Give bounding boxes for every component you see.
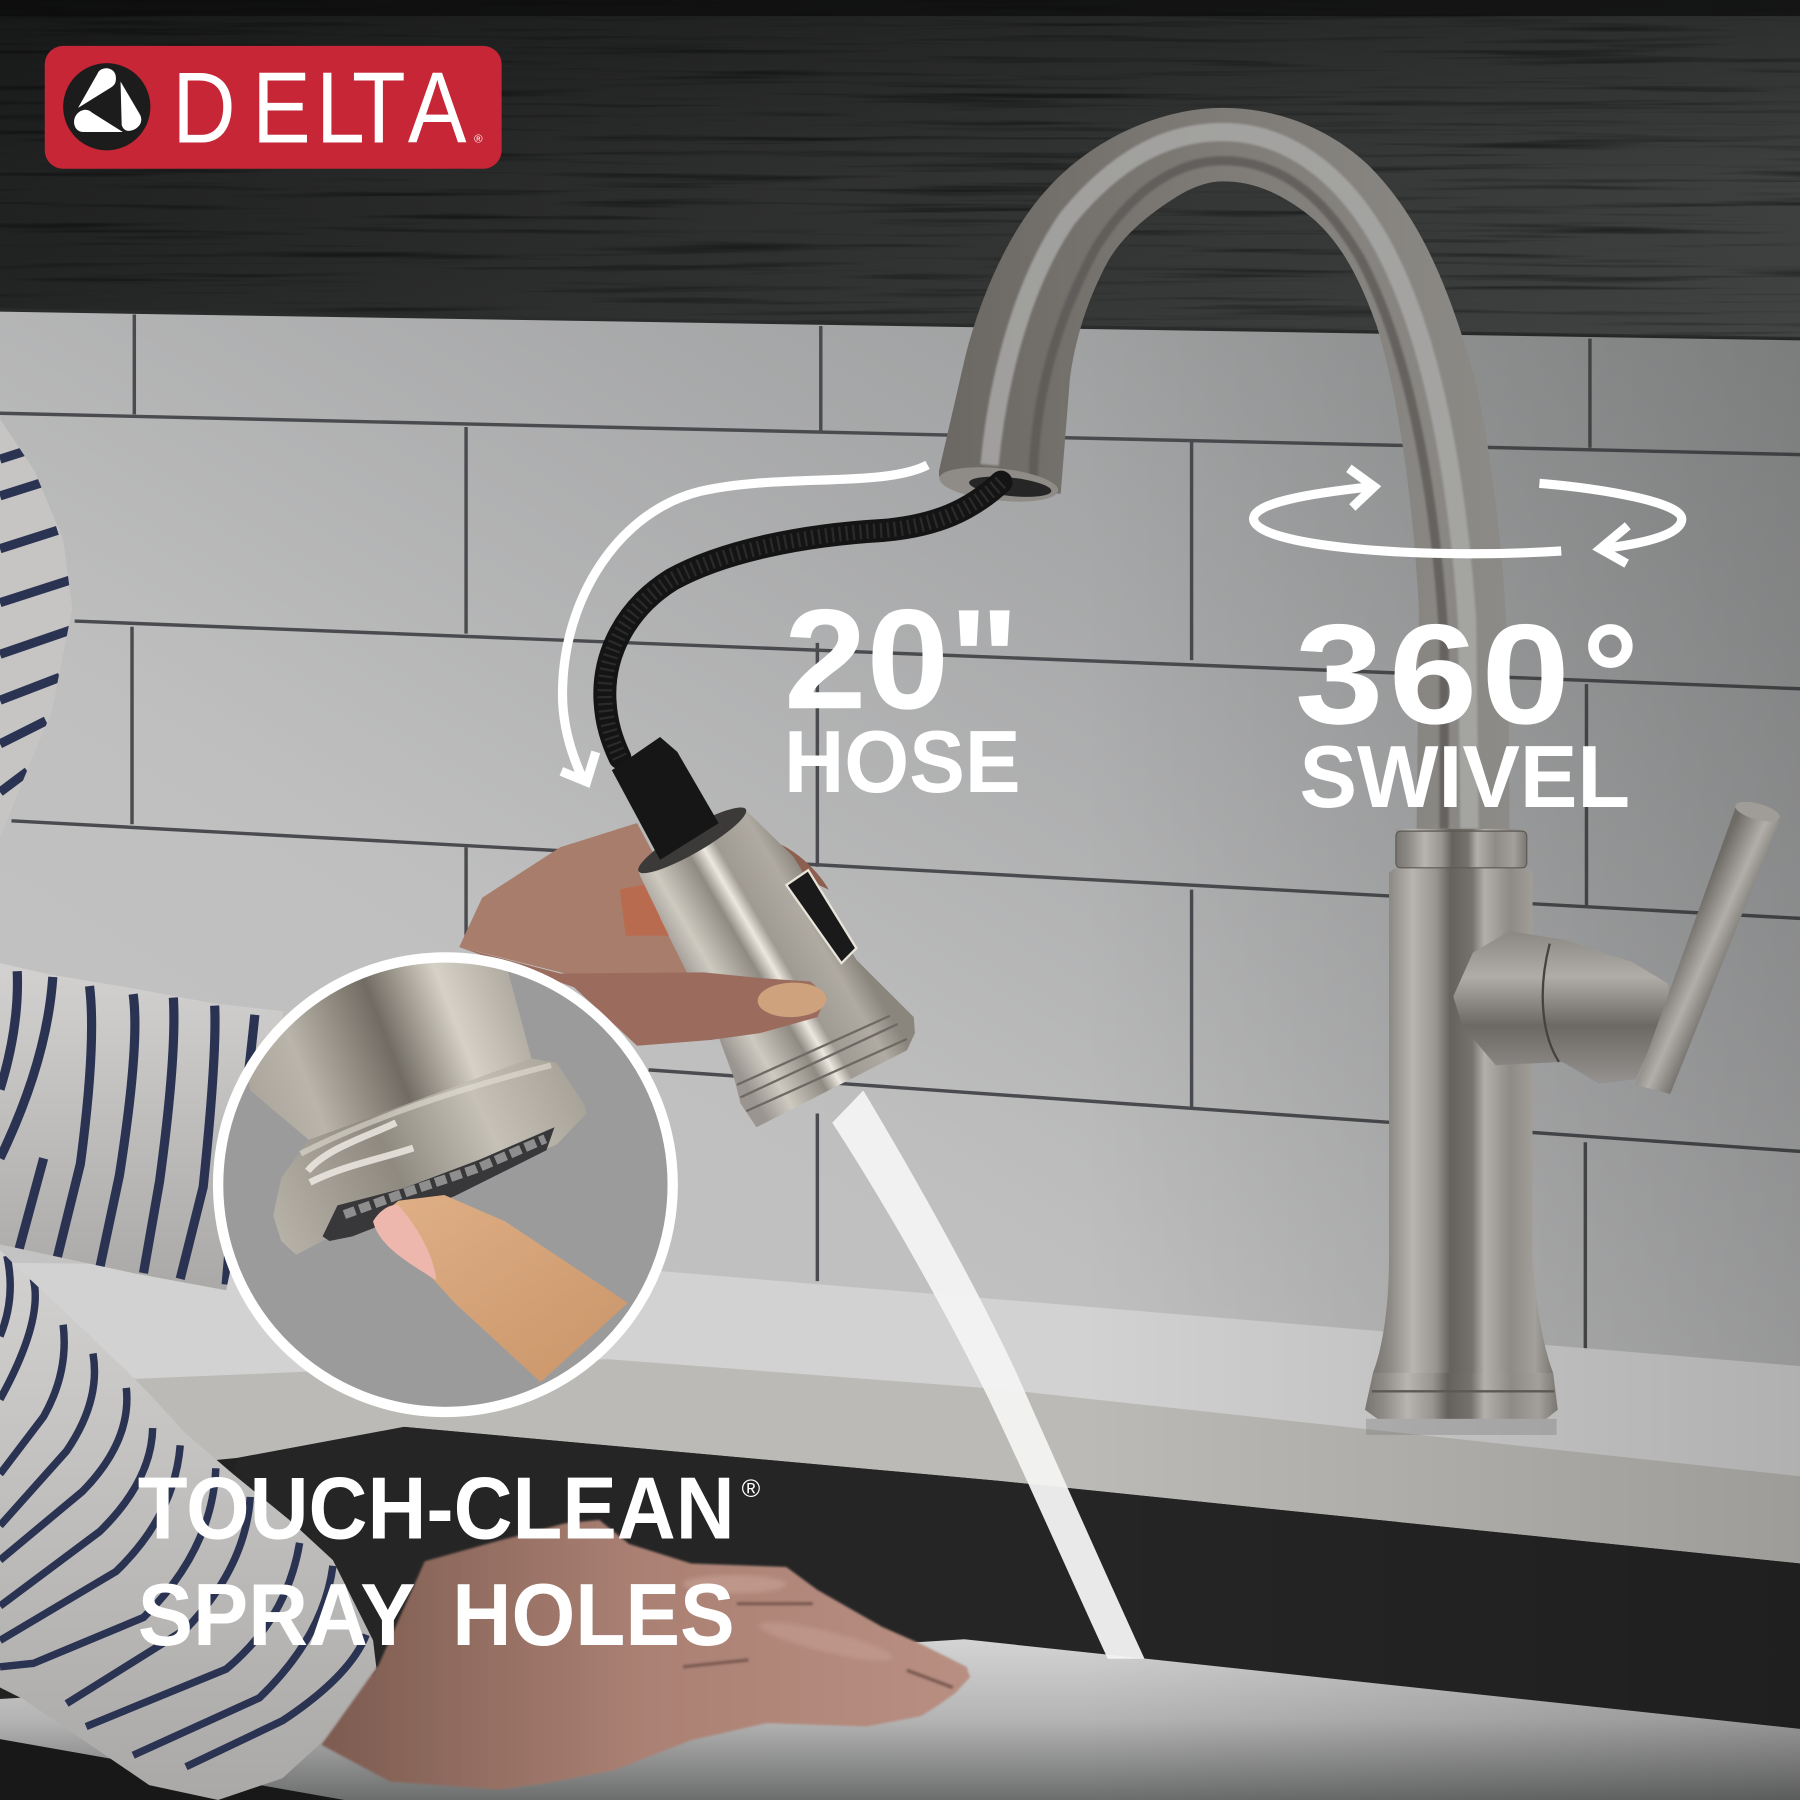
pull-down sprayer [459, 737, 915, 1127]
callout: 360 degree swivel: 360 [1295, 595, 1570, 754]
tile wall [0, 310, 1800, 1378]
callout: touch-clean spray holes: SPRAY [138, 1565, 416, 1664]
hose [605, 482, 1001, 758]
sleeve: upper left [0, 420, 72, 796]
callout: 360 degree swivel: ° [1582, 595, 1639, 754]
sprayer button [786, 870, 856, 963]
logo wordmark: DELTA [172, 52, 467, 165]
inset: touch-clean close-up [218, 918, 673, 1412]
sprayer top ring [632, 798, 752, 882]
callout: touch-clean spray holes: HOLES [452, 1565, 735, 1664]
faucet handle [1453, 798, 1782, 1094]
hose connector [612, 737, 719, 860]
sprayer collar ridges [737, 1016, 907, 1111]
hand holding sprayer [459, 823, 829, 1022]
faucet top collar [1396, 831, 1527, 868]
callout: 360 degree swivel [1295, 595, 1639, 826]
callout: touch-clean spray holes: TOUCH-CLEAN [138, 1458, 735, 1557]
thumb nail [757, 981, 827, 1018]
callout: 20 inch hose [784, 580, 1021, 811]
counter and sink [0, 1263, 1800, 1800]
faucet body [1373, 829, 1553, 1373]
faucet [938, 108, 1782, 1435]
water stream [832, 1091, 1145, 1659]
callout: 20 inch hose: HOSE [784, 712, 1021, 811]
striped sleeves and hands [0, 413, 970, 1800]
sleeve: forearm [0, 959, 287, 1297]
faucet base ring [1365, 1373, 1558, 1435]
callout: touch-clean spray holes: ® [742, 1475, 761, 1503]
callout: touch-clean spray holes [138, 1458, 761, 1664]
sprayer body [638, 807, 915, 1127]
arrow: hose pull-down [561, 465, 928, 782]
logo: Delta badge [45, 46, 502, 169]
thumb [459, 947, 827, 1046]
arrow: swivel [1254, 468, 1682, 564]
callout: 20 inch hose: 20" [784, 580, 1019, 739]
callout: 360 degree swivel: SWIVEL [1299, 727, 1630, 826]
logo mark [63, 63, 150, 150]
sleeve: front arm [0, 1246, 390, 1800]
blurred lower hand [321, 1520, 970, 1790]
faucet spout [938, 108, 1510, 831]
wood cabinet background [0, 0, 1800, 356]
registered mark: ® [474, 133, 483, 145]
